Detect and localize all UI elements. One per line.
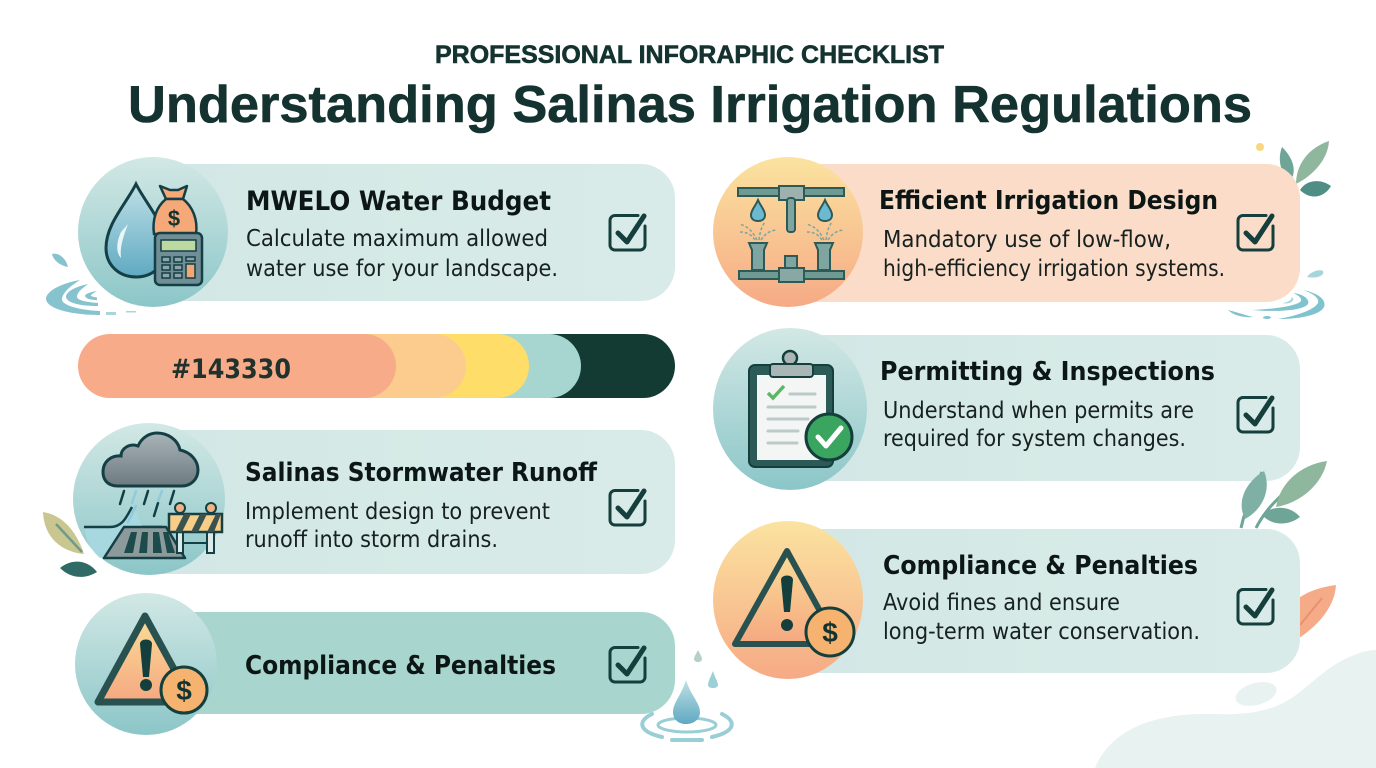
panel: Compliance & Penalties (right) — [713, 521, 1300, 679]
color palette bar — [78, 334, 675, 398]
color code label: #143330 — [171, 354, 291, 385]
icon: checkbox — [610, 490, 645, 525]
heading: Compliance & Penalties — [245, 651, 556, 681]
decoration: left ripple — [46, 254, 136, 315]
icon: warning triangle with coin — [735, 551, 854, 656]
description: Avoid fines and ensure — [883, 590, 1120, 616]
panel: Salinas Stormwater Runoff — [73, 423, 675, 575]
panel: Efficient Irrigation Design — [713, 157, 1300, 307]
icon: irrigation pipes and sprinklers — [738, 186, 844, 282]
description: Implement design to prevent — [245, 499, 550, 525]
panel: Compliance & Penalties (left) — [75, 593, 675, 735]
decoration: top right leaves — [1256, 141, 1331, 197]
description — [883, 398, 1194, 452]
icon: checkbox — [1238, 590, 1273, 624]
icon: warning triangle with coin: $ — [822, 617, 838, 648]
icon: clipboard with approval badge — [749, 351, 852, 467]
decoration: orange leaf — [1296, 585, 1336, 640]
icon: water drop and budget calculator — [106, 184, 202, 285]
description: runoff into storm drains. — [245, 527, 498, 553]
description — [245, 499, 550, 553]
description: Understand when permits are — [883, 398, 1194, 424]
heading: MWELO Water Budget — [246, 186, 551, 217]
heading: Compliance & Penalties — [883, 551, 1198, 581]
icon: storm cloud, drain and barricade — [84, 433, 222, 558]
decoration: water droplet — [642, 650, 732, 740]
decoration: right ripple — [1228, 270, 1325, 319]
description — [883, 227, 1225, 282]
description: high-efficiency irrigation systems. — [883, 256, 1225, 282]
icon: checkbox — [610, 648, 645, 682]
decoration: middle right leaves — [1241, 461, 1327, 528]
eyebrow title: PROFESSIONAL INFORAPHIC CHECKLIST — [435, 41, 944, 69]
panel: MWELO Water Budget — [78, 157, 675, 307]
description: water use for your landscape. — [246, 256, 558, 282]
heading: Permitting & Inspections — [880, 357, 1215, 387]
background blob — [1095, 650, 1376, 768]
description: long-term water conservation. — [883, 619, 1200, 645]
description — [246, 226, 558, 282]
description: required for system changes. — [883, 426, 1186, 452]
icon: checkbox — [610, 216, 645, 250]
icon: checkbox — [1238, 398, 1273, 432]
decoration: left leaves — [43, 512, 97, 577]
icon: warning triangle with coin — [98, 616, 207, 713]
description — [883, 590, 1200, 645]
icon: warning triangle with coin: $ — [176, 675, 192, 706]
icon: water drop and budget calculator: $ — [168, 206, 180, 231]
heading: Efficient Irrigation Design — [879, 186, 1218, 216]
panel: Permitting & Inspections — [713, 328, 1300, 490]
description: Calculate maximum allowed — [246, 226, 548, 252]
heading: Salinas Stormwater Runoff — [245, 458, 598, 488]
icon: checkbox — [1238, 216, 1273, 250]
description: Mandatory use of low-flow, — [883, 227, 1171, 253]
main title: Understanding Salinas Irrigation Regulations — [128, 76, 1252, 134]
